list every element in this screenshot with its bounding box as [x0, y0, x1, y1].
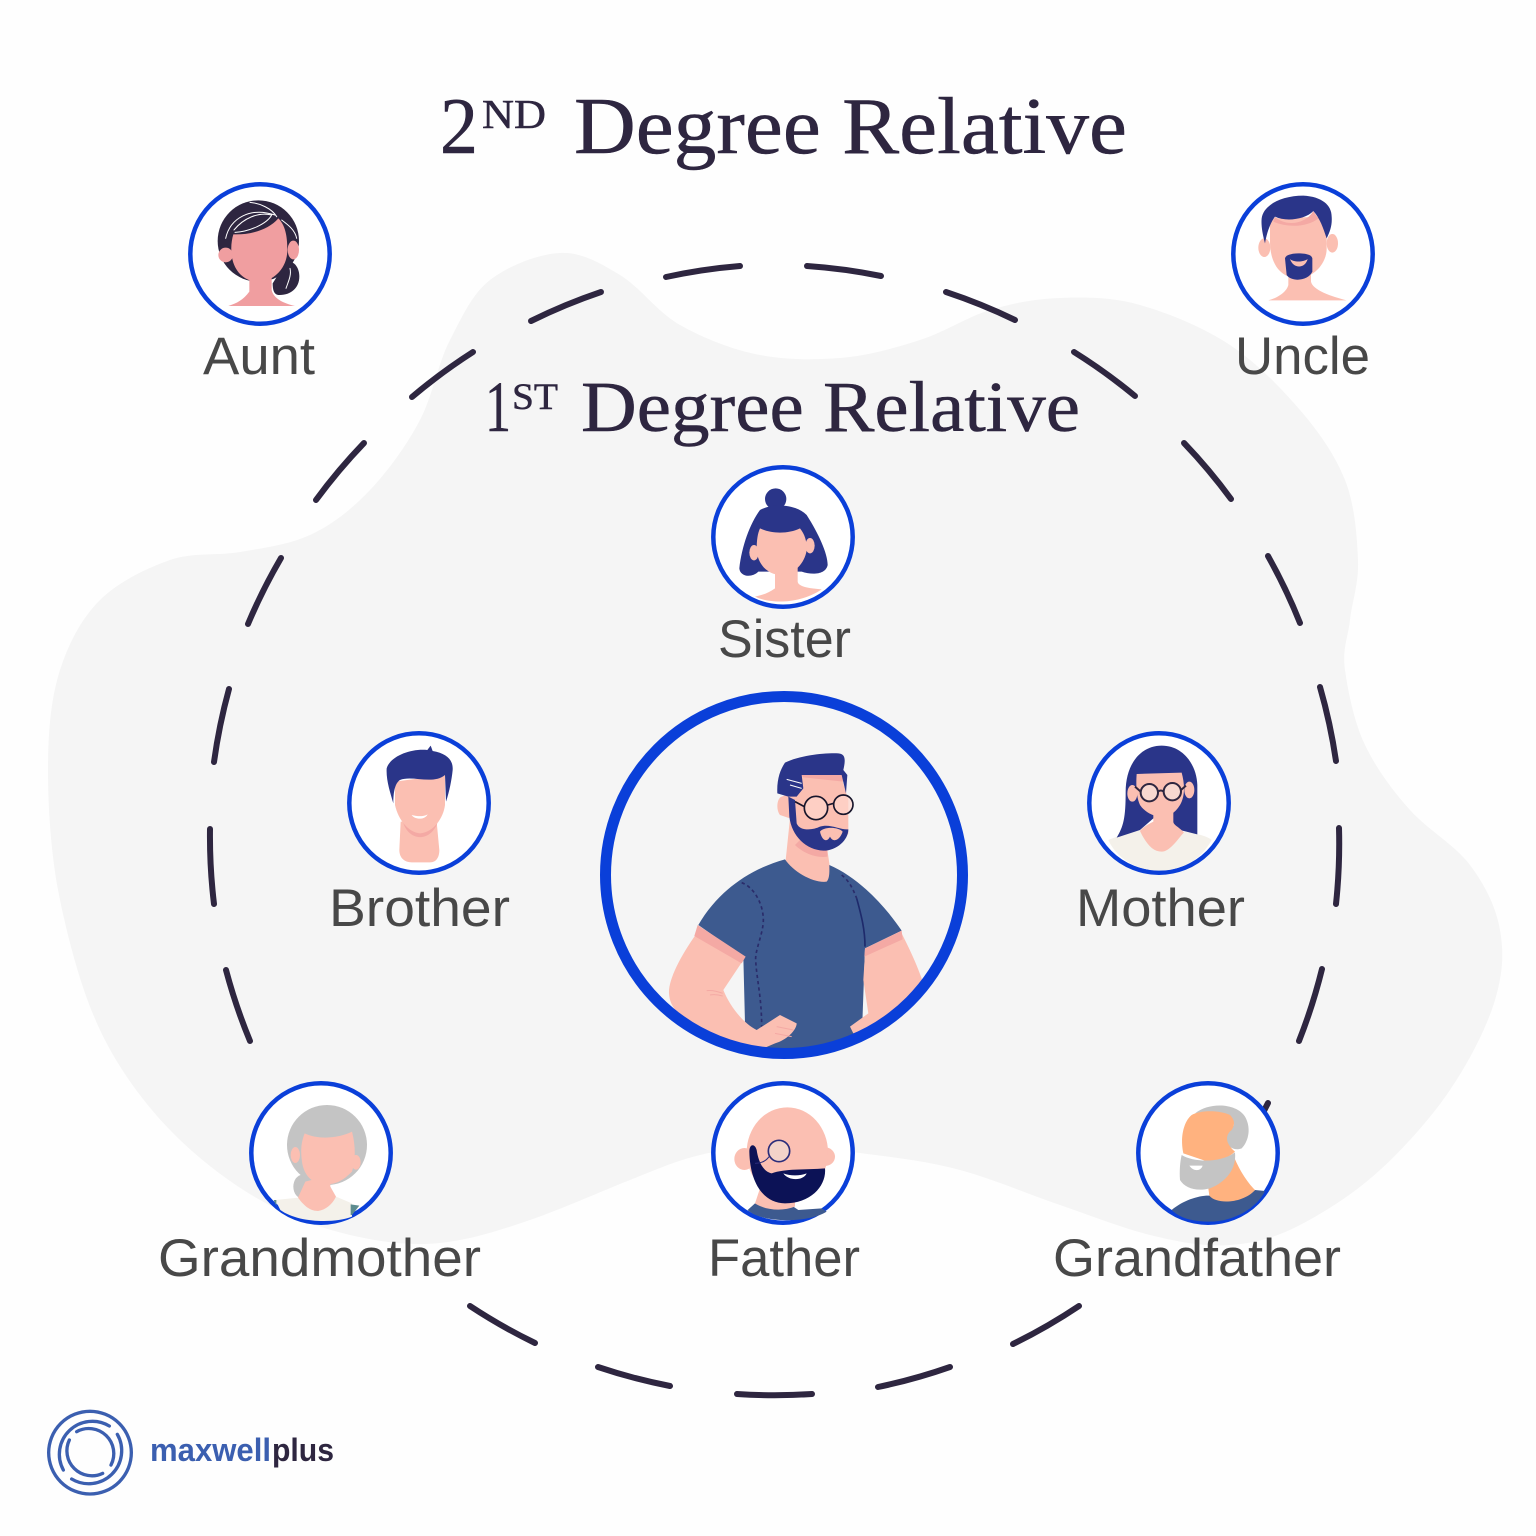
glasses	[795, 795, 853, 820]
avatar: grandmother	[251, 1083, 391, 1223]
heading: first degree relative: 1	[485, 367, 511, 447]
avatar: uncle	[1233, 184, 1373, 324]
label: grandmother: Grandmother	[158, 1229, 481, 1288]
right arm	[850, 933, 923, 1033]
logo wordmark: maxwell	[150, 1432, 271, 1468]
main person ring	[606, 696, 962, 1054]
logo wordmark: plus	[272, 1432, 334, 1468]
avatar: mother	[1089, 733, 1229, 873]
label: father: Father	[708, 1229, 860, 1288]
left arm	[669, 933, 797, 1048]
dashed circle: second degree boundary	[210, 266, 1339, 1395]
label: brother: Brother	[329, 879, 510, 938]
label: aunt: Aunt	[203, 327, 315, 386]
avatar: main person	[669, 753, 923, 1053]
title: second degree relative: 2	[440, 83, 478, 171]
heading: first degree relative: ST	[512, 377, 558, 418]
title: second degree relative: Degree Relative	[574, 83, 1127, 171]
avatar: grandfather	[1138, 1083, 1278, 1223]
label: sister: Sister	[718, 610, 851, 669]
face	[800, 776, 848, 850]
ear and neck	[777, 796, 830, 882]
heading: first degree relative: Degree Relative	[581, 367, 1080, 447]
shirt	[698, 859, 902, 1053]
label: uncle: Uncle	[1235, 327, 1370, 386]
title: second degree relative: ND	[482, 91, 546, 137]
hair and beard	[777, 753, 847, 797]
avatar: father	[713, 1083, 853, 1223]
label: grandfather: Grandfather	[1053, 1229, 1341, 1288]
avatar: sister	[713, 467, 853, 607]
avatar: aunt	[190, 184, 330, 324]
avatar: brother	[349, 733, 489, 873]
logo icon	[49, 1411, 131, 1494]
label: mother: Mother	[1076, 879, 1245, 938]
background blob	[48, 253, 1502, 1245]
